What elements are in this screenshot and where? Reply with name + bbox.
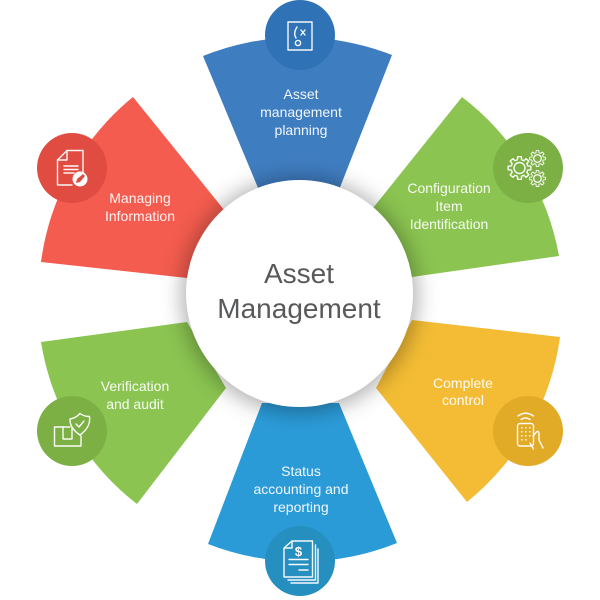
- label: complete control: Complete: [433, 375, 493, 391]
- icon: planning board: [265, 0, 335, 70]
- label: status accounting and reporting: accounting and: [254, 481, 348, 497]
- label: managing information: Information: [105, 208, 175, 224]
- label: asset management planning: management: [260, 104, 342, 120]
- center title: Asset: [264, 258, 334, 289]
- panel: managing information: [41, 97, 225, 278]
- label: complete control: control: [442, 392, 484, 408]
- panel: complete control: [376, 320, 560, 502]
- icon: document with pencil: [37, 133, 107, 203]
- icon: box with shield: [37, 396, 107, 466]
- center circle shadow: [182, 177, 418, 413]
- label: asset management planning: planning: [275, 122, 327, 138]
- icon: remote control in hand: [493, 396, 563, 466]
- icon: stacked invoices: [265, 526, 335, 596]
- label: configuration item identification: Configuration: [407, 180, 491, 196]
- panel: asset management planning: [203, 37, 392, 195]
- label: verification and audit: and audit: [106, 396, 164, 412]
- center title: Management: [217, 293, 381, 324]
- panel: status accounting and reporting: [208, 403, 397, 562]
- panel: configuration item identification: [373, 97, 559, 277]
- panel: verification and audit: [41, 322, 226, 504]
- label: status accounting and reporting: Status: [281, 463, 321, 479]
- label: configuration item identification: Identification: [410, 216, 488, 232]
- label: managing information: Managing: [109, 190, 171, 206]
- dollar sign: $: [295, 544, 303, 559]
- label: status accounting and reporting: reporting: [273, 499, 329, 515]
- label: verification and audit: Verification: [101, 378, 169, 394]
- label: asset management planning: Asset: [283, 86, 319, 102]
- label: configuration item identification: Item: [435, 198, 463, 214]
- icon: gears: [493, 133, 563, 203]
- center circle: [186, 180, 413, 407]
